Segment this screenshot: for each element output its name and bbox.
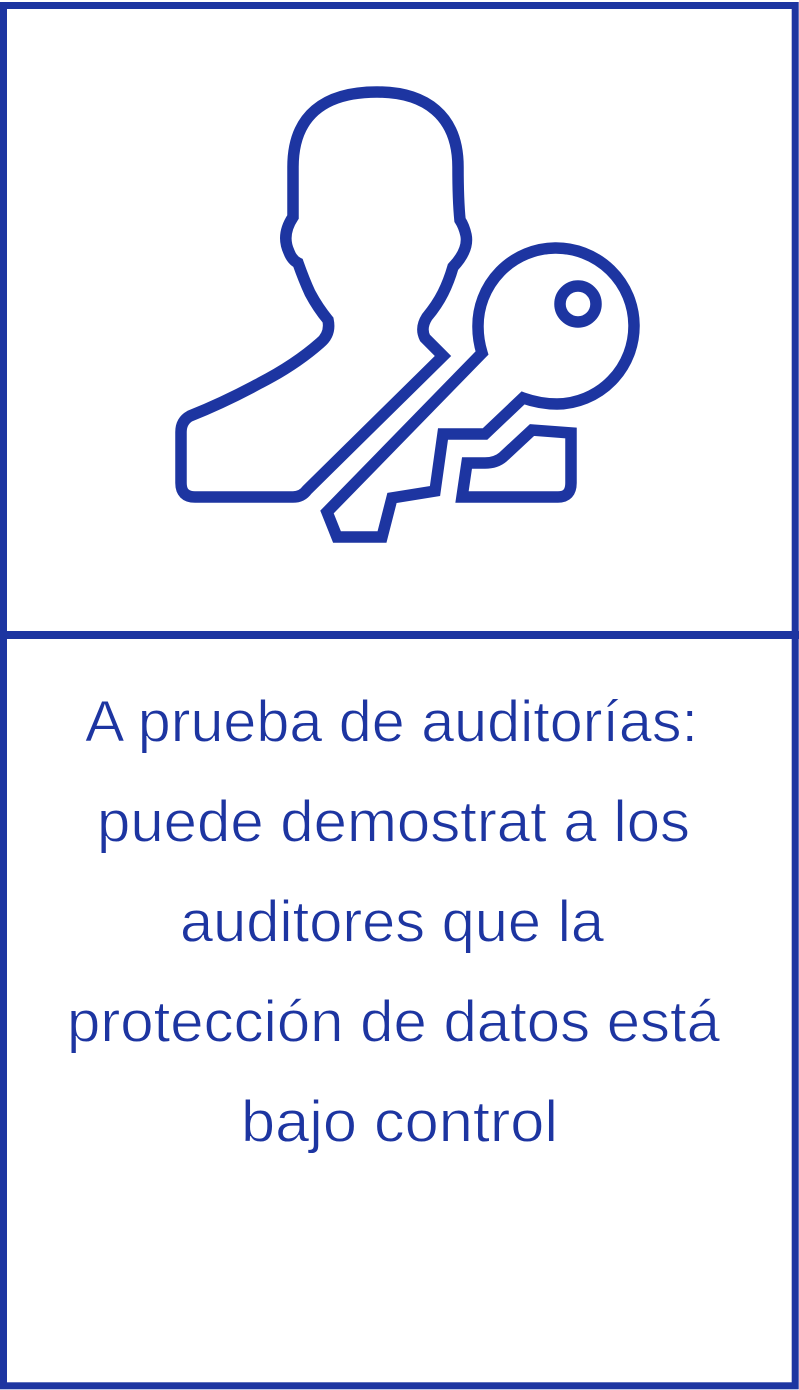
line 3: auditores que la <box>180 889 605 954</box>
line 5: bajo control <box>241 1089 558 1154</box>
icon: shoulder fragment <box>462 430 571 497</box>
icon: person silhouette <box>181 92 466 497</box>
icon: person with key <box>181 92 634 537</box>
icon: key hole <box>560 286 596 322</box>
line 1: A prueba de auditorías: <box>85 689 698 754</box>
divider between icon and text panels <box>0 631 799 639</box>
text block: description <box>67 689 721 1154</box>
line 4: protección de datos está <box>67 989 721 1054</box>
line 2: puede demostrat a los <box>97 789 690 854</box>
icon: key <box>327 248 634 537</box>
